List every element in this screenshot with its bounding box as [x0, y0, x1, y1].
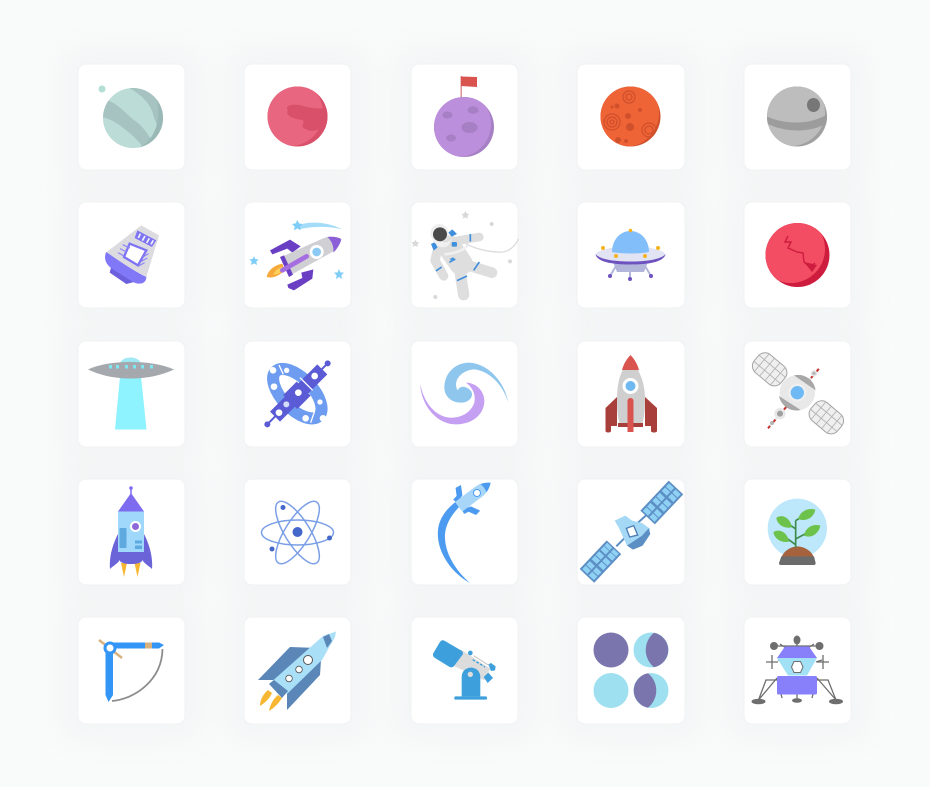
icon: green striped planet with moon [98, 86, 163, 148]
panel: saucer beam card [78, 341, 185, 447]
panel: capsule card [78, 202, 185, 308]
panel: ascending rocket card [411, 469, 518, 585]
panel: galaxy card [411, 341, 518, 447]
icon: rocket with curved trail [438, 469, 501, 583]
icon: red and grey rocket [606, 355, 657, 432]
icon: lunar lander [752, 636, 843, 704]
panel: moon phases card [577, 617, 685, 724]
panel: lunar lander card [744, 617, 851, 724]
icon: rocket with stars [249, 220, 344, 290]
panel: cracked red planet card [744, 202, 851, 308]
icon: drafting compass [99, 640, 164, 702]
icon: four moon phases [594, 632, 668, 708]
icon: pink planet [268, 86, 328, 146]
icon: orbital station [264, 360, 331, 427]
panel: round satellite card [744, 341, 851, 447]
panel: red and grey rocket card [577, 341, 685, 447]
panel: plant dome card [744, 479, 851, 585]
icon: satellite with solar arrays [580, 481, 683, 583]
icon: blue diagonal rocket [258, 632, 336, 711]
panel: astronaut card [411, 202, 518, 308]
panel: blue diagonal rocket card [244, 617, 351, 724]
panel: compass card [78, 617, 185, 724]
panel: flying saucer card [577, 202, 685, 308]
panel: blue and purple rocket card [78, 479, 185, 585]
icon: telescope on stand [433, 640, 496, 700]
icon: orange cratered planet [600, 86, 660, 146]
panel: atom card [244, 479, 351, 585]
icon: saucer with tractor beam [88, 358, 174, 430]
panel: solar panel satellite card [577, 479, 685, 585]
panel: pink planet card [244, 64, 351, 170]
icon: floating astronaut [411, 211, 518, 299]
icon: satellite with mesh panels [749, 349, 847, 437]
icon: atom [262, 495, 334, 570]
panel: orbital station card [244, 341, 351, 447]
icon: plant under glass dome [768, 499, 827, 565]
panel: telescope card [411, 617, 518, 724]
panel: rocket and stars card [244, 202, 351, 308]
icon: space capsule [105, 225, 159, 284]
icon: spiral galaxy [420, 363, 508, 424]
panel: green planet card [78, 64, 185, 170]
icon: grey battle station planet [767, 86, 827, 146]
icon: cracked red planet [766, 223, 830, 287]
icon: blue and purple rocket [110, 486, 152, 577]
icon: flying saucer [596, 229, 666, 281]
panel: purple moon card [411, 64, 518, 170]
panel: grey death-star card [744, 64, 851, 170]
panel: orange planet card [577, 64, 685, 170]
icon: purple moon with flag [434, 76, 494, 157]
